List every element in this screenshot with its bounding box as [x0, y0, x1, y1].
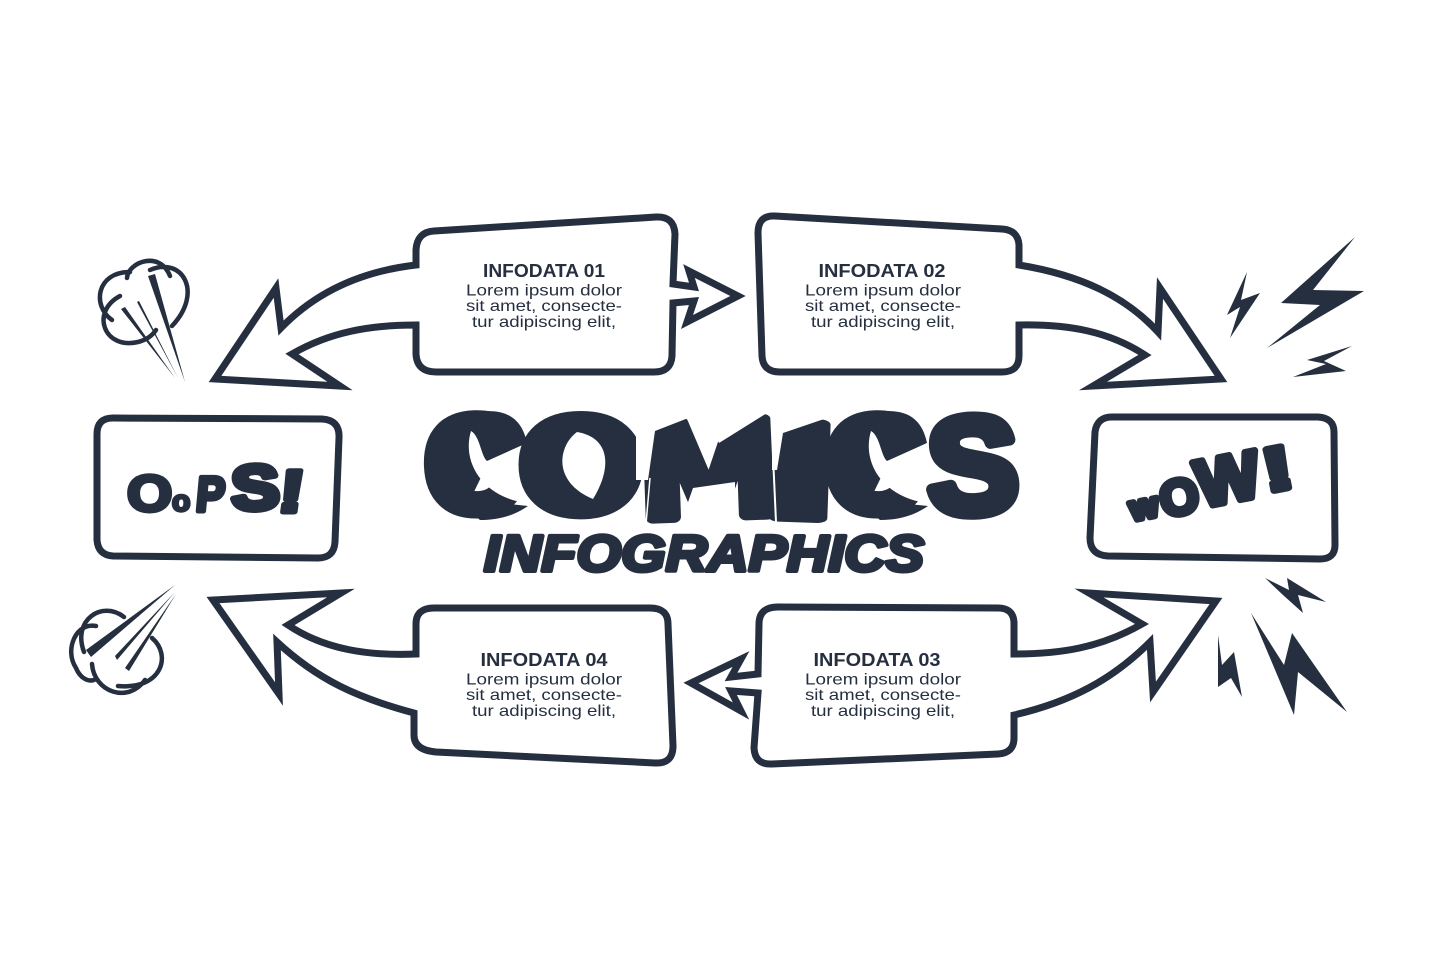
text: infodata 04: sit amet, consecte- [466, 687, 622, 704]
text: oops [127, 453, 309, 525]
text: wow: W [1190, 438, 1266, 522]
text: infodata 03: sit amet, consecte- [805, 687, 961, 704]
panel: infodata 04 with arrow [213, 593, 673, 763]
text: oops: P [194, 466, 227, 522]
text: infodata 04: tur adipiscing elit, [472, 703, 616, 720]
text: infodata 04: Lorem ipsum dolor [466, 672, 623, 688]
text: infodata 02: sit amet, consecte- [805, 298, 961, 315]
text: infodata 04: INFODATA 04 [480, 650, 608, 670]
text: wow: ! [1256, 431, 1299, 506]
text: infodata 03: Lorem ipsum dolor [805, 672, 962, 688]
icon: smoke cloud bottom left [71, 585, 176, 693]
panel: infodata 02 with arrow [758, 216, 1221, 386]
title: comics [422, 387, 1021, 548]
icon: lightning bolts bottom right [1218, 578, 1347, 715]
title: comics: I [759, 393, 840, 548]
text: oops: ! [274, 458, 309, 525]
text: infodata 01: sit amet, consecte- [466, 298, 622, 315]
text: infodata 04 [466, 650, 623, 720]
text: infodata 03: INFODATA 03 [814, 650, 940, 670]
panel: wow box [1090, 417, 1335, 559]
title: comics: S [925, 388, 1021, 543]
text: oops: O [127, 464, 172, 522]
title: comics: C [823, 387, 926, 542]
text: oops: o [172, 485, 190, 518]
text: wow: O [1155, 466, 1204, 528]
text: infodata 02 [805, 261, 962, 331]
subtitle: infographics: INFOGRAPHICS [484, 525, 924, 582]
text: oops: S [230, 453, 281, 524]
panel: infodata 01 with arrows [215, 217, 738, 386]
text: infodata 02: Lorem ipsum dolor [805, 282, 962, 300]
text: wow [1120, 431, 1300, 535]
text: infodata 03: tur adipiscing elit, [811, 703, 955, 720]
text: infodata 02: INFODATA 02 [818, 261, 946, 281]
panel: infodata 03 with arrows [691, 593, 1216, 764]
title: comics: C [422, 387, 525, 542]
text: wow: w [1126, 485, 1162, 528]
icon: smoke cloud top left [100, 261, 188, 382]
text: infodata 02: tur adipiscing elit, [811, 314, 955, 331]
title: comics: O [519, 390, 643, 541]
text: infodata 01 [466, 261, 623, 331]
title: comics: M [638, 390, 779, 547]
panel: oops box [97, 418, 339, 558]
icon: lightning bolts top right [1227, 237, 1364, 377]
text: infodata 01: tur adipiscing elit, [472, 314, 616, 331]
text: infodata 01: Lorem ipsum dolor [466, 282, 623, 300]
text: infodata 03 [805, 650, 962, 720]
text: infodata 01: INFODATA 01 [483, 261, 605, 281]
